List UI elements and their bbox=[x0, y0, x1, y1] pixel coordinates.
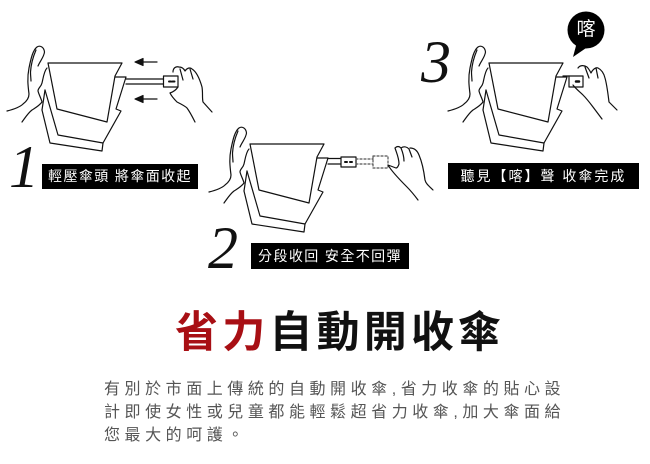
title: 省力自動開收傘 bbox=[175, 309, 505, 357]
label: step 3 bbox=[448, 163, 639, 189]
panel: step 1 umbrella bbox=[7, 46, 212, 151]
label: step 1 bbox=[42, 164, 198, 189]
label: step 2 bbox=[251, 243, 409, 269]
icon: right hand bbox=[573, 66, 617, 119]
icon: handle shaft bbox=[328, 158, 341, 164]
text block: description: 您最大的呵護。 bbox=[104, 427, 248, 444]
icon: right hand bbox=[170, 67, 212, 122]
icon: handle head bbox=[563, 76, 583, 87]
panel: step 2 umbrella bbox=[209, 127, 433, 232]
icon: speech bubble bbox=[568, 12, 604, 57]
text block: description: 計即使女性或兒童都能輕鬆超省力收傘,加大傘面給 bbox=[104, 404, 565, 421]
step number 3: 3 bbox=[421, 29, 451, 95]
label: step 3: 聽見【喀】聲 收傘完成 bbox=[461, 168, 626, 184]
speech bubble text: 喀 bbox=[576, 19, 596, 40]
icon: dashed pull guide bbox=[356, 156, 388, 168]
icon: handle button bbox=[164, 76, 178, 87]
step number 2: 2 bbox=[208, 215, 238, 281]
icon: left hand bbox=[7, 46, 47, 122]
text block: description bbox=[104, 380, 565, 444]
arrow: lower bbox=[135, 96, 157, 102]
icon: right hand bbox=[388, 146, 433, 200]
icon: handle shaft bbox=[126, 79, 163, 84]
step number 1: 1 bbox=[9, 134, 39, 200]
arrow: upper bbox=[135, 58, 157, 66]
label: step 1: 輕壓傘頭 將傘面收起 bbox=[48, 168, 192, 184]
icon: handle button bbox=[341, 157, 356, 167]
icon: left hand bbox=[209, 127, 249, 203]
icon: left hand bbox=[448, 46, 488, 122]
panel: step 3 umbrella bbox=[448, 46, 617, 151]
label: step 2: 分段收回 安全不回彈 bbox=[258, 248, 402, 264]
text block: description: 有別於市面上傳統的自動開收傘,省力收傘的貼心設 bbox=[104, 381, 565, 398]
